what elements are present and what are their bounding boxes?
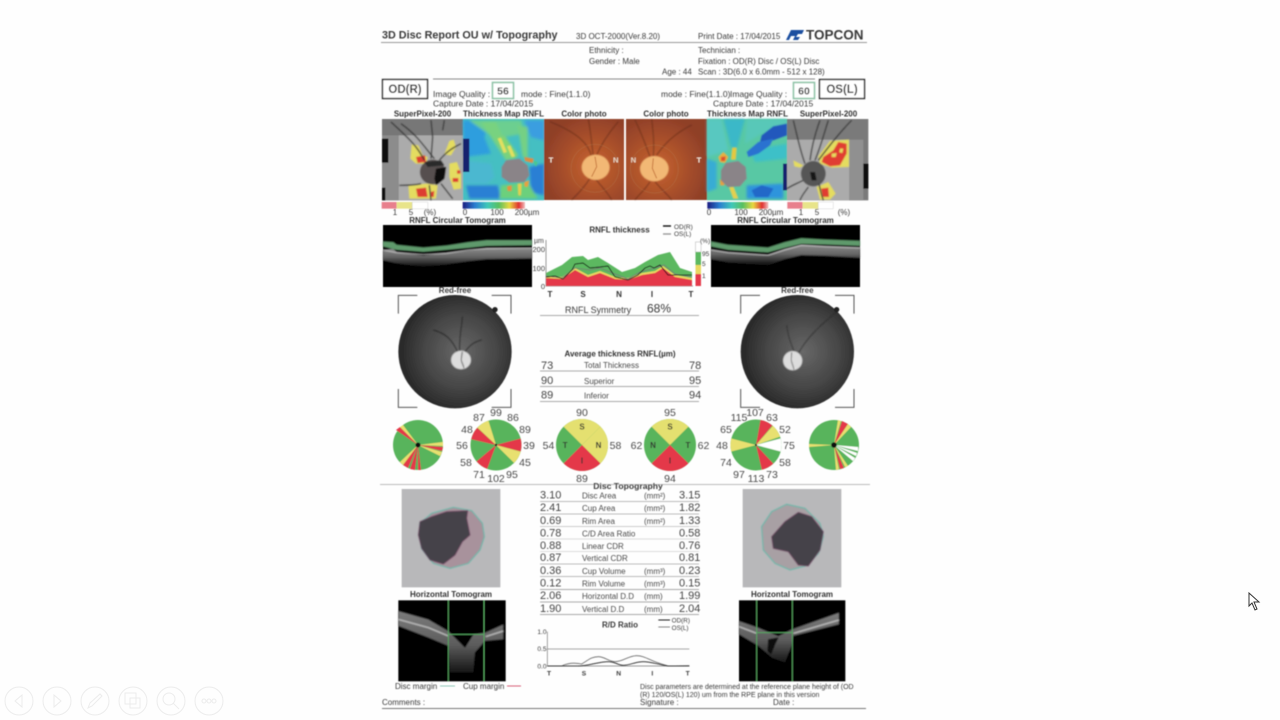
legend labels: 0 xyxy=(463,208,468,217)
legend labels: 5 xyxy=(409,208,414,217)
chart: RNFL thickness: OS(L) xyxy=(674,231,691,238)
OD(R) eye label xyxy=(382,80,428,98)
average thickness table: Total Thickness xyxy=(584,361,639,370)
topography table xyxy=(540,490,700,615)
disc parameters note: Disc parameters are determined at the reference plane height of (OD xyxy=(640,684,854,691)
icon: more xyxy=(195,687,223,715)
comments and signature xyxy=(382,698,866,708)
chart: R/D ratio: S xyxy=(582,670,587,677)
pie: OS fine sectors xyxy=(809,420,859,470)
chart: RNFL thickness: OD(R) xyxy=(674,224,693,231)
topography table: Linear CDR xyxy=(582,542,624,551)
pie: OS quadrants: 95 xyxy=(664,407,676,419)
pie: OD quadrants: 90 xyxy=(576,407,588,419)
patient info: Fixation : OD(R) Disc / OS(L) Disc xyxy=(698,57,819,66)
topography table: Rim Volume xyxy=(582,580,626,588)
disc parameters note xyxy=(640,684,854,699)
red-free image OS: Red-free xyxy=(781,286,814,295)
topography table: Cup Area xyxy=(582,504,616,513)
image column headings: Thickness Map RNFL xyxy=(463,110,544,118)
OS image quality: Image Quality : xyxy=(730,89,787,99)
pie: OS quadrants xyxy=(631,407,709,485)
pie: OD quadrants: T xyxy=(563,441,568,450)
patient info: Scan : 3D(6.0 x 6.0mm - 512 x 128) xyxy=(698,68,825,76)
pie: OD quadrants: 89 xyxy=(576,473,588,485)
image: superpixel OS xyxy=(787,119,868,200)
pie: OS twelve sectors: 48 xyxy=(716,440,728,452)
legend labels: (%) xyxy=(424,208,437,217)
icon: previous xyxy=(5,687,33,715)
tomogram legend: Cup margin xyxy=(463,682,504,691)
legend labels: 0 xyxy=(707,208,712,217)
topography table: (mm³) xyxy=(644,567,666,576)
pie: OS quadrants: 62 xyxy=(698,440,709,452)
pie: OD quadrants: 54 xyxy=(543,440,554,452)
topography table: 1.99 xyxy=(679,590,700,602)
average thickness table: 89 xyxy=(541,390,553,402)
chart: RNFL thickness: 5 xyxy=(702,261,706,268)
pie: OD twelve sectors xyxy=(456,407,535,485)
topography table: 2.04 xyxy=(679,603,700,615)
disc topography map OS xyxy=(743,489,841,587)
pie: OS twelve sectors: 97 xyxy=(733,469,745,481)
chart: R/D ratio: 0.5 xyxy=(537,646,547,653)
topography table: (mm²) xyxy=(644,504,666,513)
pie: OS quadrants: 94 xyxy=(664,473,676,485)
legend labels: 100 xyxy=(490,208,504,217)
average thickness table: Inferior xyxy=(584,392,609,400)
topography table: 0.69 xyxy=(540,515,561,527)
chart: R/D ratio: 1.0 xyxy=(537,629,547,636)
topography table: Horizontal D.D xyxy=(582,592,634,601)
chart: RNFL thickness: RNFL thickness xyxy=(589,226,650,234)
topography table: 0.36 xyxy=(540,565,561,577)
topography table: 1.33 xyxy=(679,515,700,527)
chart: R/D ratio xyxy=(537,618,690,677)
pie: OD twelve sectors: 95 xyxy=(506,469,518,481)
pie: OD quadrants: 58 xyxy=(610,440,621,452)
pie: OD twelve sectors: 39 xyxy=(523,440,535,452)
average thickness table: Average thickness RNFL(µm) xyxy=(564,350,676,358)
chart: RNFL thickness: 1 xyxy=(702,273,706,280)
OD(R) eye label: OD(R) xyxy=(388,84,422,96)
icon: zoom xyxy=(157,687,185,715)
horizontal tomogram OD xyxy=(398,590,506,681)
legend labels: 100 xyxy=(734,208,748,217)
topography table: 3.10 xyxy=(540,490,561,502)
image column headings xyxy=(394,110,858,118)
OD RNFL circular tomogram xyxy=(383,216,532,287)
OS RNFL circular tomogram xyxy=(711,216,860,287)
percentile legend xyxy=(696,242,701,252)
pie: OS quadrants: 62 xyxy=(631,440,642,452)
pie: OD quadrants xyxy=(543,407,621,485)
average thickness table: 95 xyxy=(689,375,701,387)
chart: RNFL thickness: 200 xyxy=(532,245,545,254)
device version: 3D OCT-2000(Ver.8.20) xyxy=(576,32,660,41)
comments and signature: Comments : xyxy=(382,698,425,707)
patient info: Age : 44 xyxy=(662,68,692,76)
pie: OD fine sectors xyxy=(393,420,443,470)
topography table: 0.81 xyxy=(679,552,700,564)
topography table: C/D Area Ratio xyxy=(582,530,636,538)
chart: RNFL thickness: T xyxy=(689,290,694,299)
topography table: (mm³) xyxy=(644,580,666,588)
disc topography map OD xyxy=(402,489,500,587)
chart: R/D ratio: N xyxy=(616,670,621,677)
OS thickness line xyxy=(546,265,692,279)
legend labels: 1 xyxy=(799,208,804,217)
image: colour photo OD: N xyxy=(613,156,619,165)
legend: superpixel scale OD xyxy=(382,202,428,209)
pie: OS twelve sectors: 52 xyxy=(779,424,791,436)
pie: OS quadrants: N xyxy=(650,441,656,450)
comments and signature: Signature : xyxy=(640,698,679,707)
title: 3D Disc Report OU w/ Topography xyxy=(382,30,558,42)
chart: R/D ratio: 0.0 xyxy=(537,663,547,670)
image: colour photo OS xyxy=(626,119,707,200)
average thickness table xyxy=(540,350,701,402)
OS RNFL circular tomogram: RNFL Circular Tomogram xyxy=(737,216,834,225)
OD RNFL circular tomogram: RNFL Circular Tomogram xyxy=(409,216,506,225)
image column headings: Color photo xyxy=(643,110,689,118)
patient info: Ethnicity : xyxy=(589,46,624,55)
OD image quality: Capture Date : 17/04/2015 xyxy=(433,98,533,108)
green normal band xyxy=(546,252,692,286)
pie: OS quadrants: S xyxy=(667,422,673,432)
icon: next xyxy=(43,687,71,715)
pie: OS twelve sectors: 107 xyxy=(746,407,764,419)
RNFL symmetry: RNFL Symmetry xyxy=(565,305,632,315)
topography table: Vertical D.D xyxy=(582,605,624,614)
legend labels: 200µm xyxy=(515,208,540,217)
topography table: 1.90 xyxy=(540,603,561,615)
topography table: Disc Area xyxy=(582,492,617,500)
topography table: 1.82 xyxy=(679,502,700,514)
patient info xyxy=(589,46,825,76)
legend: superpixel scale OS xyxy=(787,202,833,209)
topography table: 0.87 xyxy=(540,552,561,564)
pie: OS quadrants: I xyxy=(669,456,671,466)
pie: OS twelve sectors: 74 xyxy=(720,457,732,469)
horizontal tomogram OS: Horizontal Tomogram xyxy=(751,590,833,599)
topography table: 2.41 xyxy=(540,502,561,514)
pie: OD twelve sectors: 45 xyxy=(519,457,531,469)
pie: OS twelve sectors: 73 xyxy=(766,469,778,481)
pie: OD quadrants: I xyxy=(581,456,583,466)
OS image quality xyxy=(661,82,814,108)
topography table: 3.15 xyxy=(679,490,700,502)
icon: slides xyxy=(119,687,147,715)
average thickness table: 78 xyxy=(689,360,701,372)
image: colour photo OS: T xyxy=(697,155,702,164)
RNFL symmetry xyxy=(540,302,699,316)
pie: OS twelve sectors: 63 xyxy=(766,412,778,424)
image column headings: Thickness Map RNFL xyxy=(707,110,788,118)
pie: OS quadrants: T xyxy=(686,441,691,450)
OD image quality: Image Quality : xyxy=(433,89,490,99)
pie: OD twelve sectors: 99 xyxy=(490,407,502,419)
legend: thickness scale OS xyxy=(707,202,768,209)
chart: R/D ratio: OD(R) xyxy=(672,618,690,625)
icon: pen xyxy=(81,687,109,715)
tomogram legend: Disc margin xyxy=(395,682,437,691)
chart: RNFL thickness: 0 xyxy=(541,282,545,291)
topography table: 0.12 xyxy=(540,578,561,590)
topography table: 0.15 xyxy=(679,578,700,590)
report header xyxy=(382,28,864,42)
pie: OS twelve sectors: 58 xyxy=(779,457,791,469)
topography table: 0.76 xyxy=(679,540,700,552)
topography table: (mm²) xyxy=(644,492,666,500)
pie: OS twelve sectors: 75 xyxy=(783,440,795,452)
patient info: Gender : Male xyxy=(589,57,640,66)
OD image quality xyxy=(433,82,591,108)
pie: OD twelve sectors: 87 xyxy=(473,412,485,424)
pie: OD twelve sectors: 86 xyxy=(507,412,519,424)
disc parameters note: (R) 120/OS(L) 120) um from the RPE plane in this version xyxy=(640,692,819,699)
topography table: 0.88 xyxy=(540,540,561,552)
topography table: (mm²) xyxy=(644,517,666,526)
topography table: 0.78 xyxy=(540,528,561,540)
print date: Print Date : 17/04/2015 xyxy=(698,32,781,41)
chart: R/D ratio: T xyxy=(547,670,551,677)
presentation toolbar xyxy=(5,687,223,715)
tomogram legend xyxy=(395,682,521,691)
image: colour photo OD: T xyxy=(549,155,554,164)
chart: RNFL thickness xyxy=(532,224,710,299)
image: thickness map OS xyxy=(707,119,787,200)
pie: OD twelve sectors: 89 xyxy=(519,424,531,436)
red abnormal band xyxy=(546,268,692,286)
topography table: Cup Volume xyxy=(582,567,626,576)
pie: OD quadrants: N xyxy=(596,441,602,450)
RNFL symmetry: 68% xyxy=(647,302,671,316)
OD image quality: mode : Fine(1.1.0) xyxy=(521,89,591,99)
topography table: (mm) xyxy=(644,605,663,614)
chart: RNFL thickness: (%) xyxy=(700,238,710,245)
chart: R/D ratio: OS(L) xyxy=(672,625,689,632)
pie: OS twelve sectors: 113 xyxy=(748,473,765,485)
topography table: 2.06 xyxy=(540,590,561,602)
scale legends xyxy=(382,202,833,209)
topography table: Vertical CDR xyxy=(582,554,628,563)
OD image quality: 56 xyxy=(497,86,509,98)
OS image quality: 60 xyxy=(798,86,810,98)
topography table: Rim Area xyxy=(582,517,615,526)
red-free image OS xyxy=(741,286,854,408)
chart: RNFL thickness: N xyxy=(616,290,622,299)
topography table: 0.58 xyxy=(679,528,700,540)
legend labels: 5 xyxy=(815,208,820,217)
OS image quality: mode : Fine(1.1.0) xyxy=(661,89,731,99)
OS(L) eye label: OS(L) xyxy=(826,84,858,96)
chart: R/D ratio: I xyxy=(651,670,653,677)
chart: RNFL thickness: T xyxy=(548,290,553,299)
patient info: Technician : xyxy=(698,46,740,55)
horizontal tomogram OS xyxy=(739,590,845,681)
heading: disc topography: Disc Topography xyxy=(593,481,663,491)
icon: topcon logo xyxy=(786,30,804,40)
yellow borderline band xyxy=(546,266,692,286)
legend labels: (%) xyxy=(838,208,851,217)
red-free image OD xyxy=(398,286,512,408)
image: colour photo OD xyxy=(544,119,624,200)
brand name: TOPCON xyxy=(806,28,864,42)
image column headings: SuperPixel-200 xyxy=(394,110,452,118)
legend labels: 200µm xyxy=(759,208,784,217)
chart: R/D ratio: R/D Ratio xyxy=(602,621,638,630)
horizontal tomogram OD: Horizontal Tomogram xyxy=(410,590,492,599)
image: colour photo OS: N xyxy=(631,155,637,164)
chart: RNFL thickness: S xyxy=(580,290,586,299)
image column headings: SuperPixel-200 xyxy=(800,110,858,118)
pie: OS twelve sectors: 115 xyxy=(731,412,748,424)
average thickness table: 73 xyxy=(541,360,553,372)
chart: RNFL thickness: µm xyxy=(534,238,544,245)
pie: OD quadrants: S xyxy=(579,422,585,432)
OS(L) eye label xyxy=(820,80,864,98)
topography table: 0.23 xyxy=(679,565,700,577)
pie: OS twelve sectors: 65 xyxy=(720,424,732,436)
OD thickness line xyxy=(546,263,692,280)
average thickness table: 90 xyxy=(541,375,553,387)
icon: mouse cursor xyxy=(1249,593,1259,610)
comments and signature: Date : xyxy=(773,698,794,707)
pie: OD twelve sectors: 102 xyxy=(487,473,505,485)
average thickness table: 94 xyxy=(689,390,701,402)
chart: RNFL thickness: 100 xyxy=(532,264,545,273)
pie: OD twelve sectors: 71 xyxy=(473,469,485,481)
topography table: (mm) xyxy=(644,592,663,601)
pie: OS twelve sectors xyxy=(716,407,795,485)
chart: RNFL thickness: 95 xyxy=(702,251,710,258)
image column headings: Color photo xyxy=(561,110,607,118)
OS image quality: Capture Date : 17/04/2015 xyxy=(713,98,813,108)
image: superpixel OD xyxy=(382,119,463,200)
legend labels xyxy=(393,208,851,217)
pie: OD twelve sectors: 48 xyxy=(461,424,473,436)
chart: R/D ratio: T xyxy=(686,670,690,677)
pie: OD twelve sectors: 56 xyxy=(456,440,468,452)
legend: thickness scale OD xyxy=(463,202,525,209)
pie: OD twelve sectors: 58 xyxy=(460,457,472,469)
red-free image OD: Red-free xyxy=(439,286,472,295)
legend labels: 1 xyxy=(393,208,398,217)
image: thickness map OD xyxy=(463,119,544,200)
average thickness table: Superior xyxy=(584,377,615,386)
chart: RNFL thickness: I xyxy=(651,290,653,299)
